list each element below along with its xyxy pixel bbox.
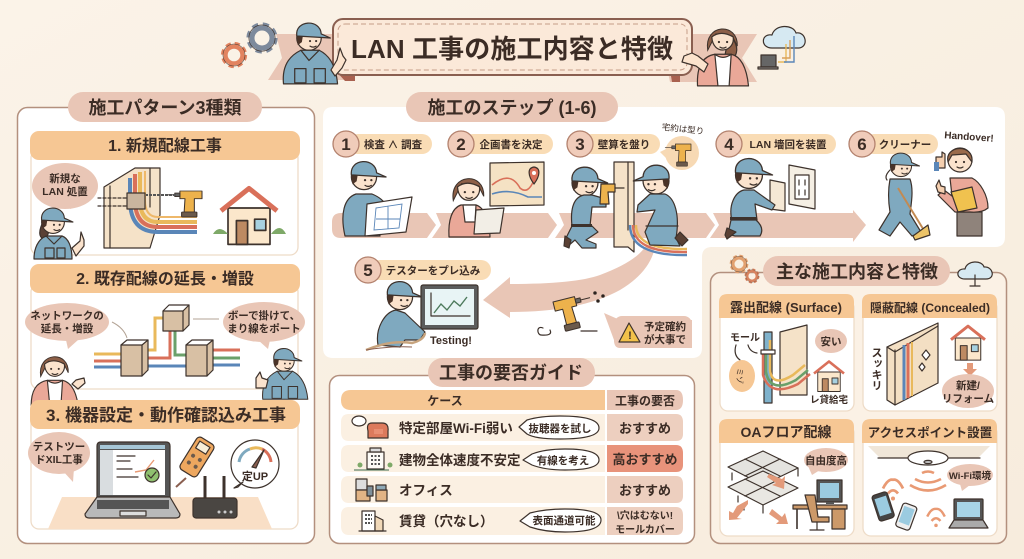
step 1 label: 1: [341, 135, 351, 154]
arrows: [729, 474, 788, 524]
icon: building: [354, 448, 392, 470]
icon: house: [951, 326, 985, 360]
bubble: 表面通道可能: [520, 509, 601, 532]
ribbon behind title: [268, 34, 757, 82]
card: surface wiring: [719, 294, 854, 411]
icon: gears: [223, 25, 275, 66]
panel: 施工パターン3種類: [18, 92, 314, 544]
step 5 label: テスターをプレ込み: [386, 264, 481, 277]
row 4: \穴はむない!: [617, 509, 673, 522]
worker drilling: [564, 167, 624, 248]
worker installing: [725, 159, 775, 239]
bubble: 新建/リフォーム: リフォーム: [942, 393, 994, 405]
icon: cloud small: [958, 262, 992, 286]
bubble: 新建/リフォーム: 新建/: [956, 379, 980, 392]
speech bubble: テストツー: [33, 441, 85, 453]
speech bubble left: 延長・増設: [41, 322, 94, 335]
phone: [895, 502, 918, 531]
title plate: [333, 19, 692, 75]
heading: guide: [428, 358, 595, 387]
bubble: 有線を考え: [523, 449, 599, 470]
process arrow: upper flow: [332, 210, 866, 242]
speech bubble right: [223, 302, 305, 349]
icon: cloud and laptop: [758, 26, 805, 69]
card: concealed wiring: [862, 294, 997, 411]
speech bubble left: [25, 303, 109, 349]
step 6 label: クリーナー: [879, 139, 931, 151]
cable junction boxes: [94, 305, 240, 376]
speech bubble right: まり線をポート: [227, 322, 301, 335]
section 3: equipment setup: [28, 400, 300, 529]
map: [490, 162, 544, 206]
row 2: 建物全体速度不安定: [399, 452, 521, 468]
wall outlet: [789, 165, 815, 209]
worker girl: [34, 208, 84, 259]
step 4 label: 4: [724, 135, 734, 154]
section 1: new wiring: [30, 131, 300, 259]
card header: 露出配線 (Surface): [730, 300, 842, 315]
row 2: [341, 445, 683, 472]
heading: steps: [406, 92, 618, 122]
icon: tester: [178, 436, 216, 478]
header: title banner: [223, 19, 805, 86]
bubble: 抜聴器を試し: 抜聴器を試し: [528, 422, 592, 435]
icon: laptop: [85, 442, 180, 518]
process arrow: return flow: [483, 247, 655, 318]
section 3 header: 3. 機器設定・動作確認込み工事: [46, 406, 286, 425]
bubble: 表面通道可能: 表面通道可能: [532, 514, 596, 527]
heading: construction patterns: [68, 92, 262, 122]
callout: orange doodle: ミゾ: [735, 368, 744, 384]
woman: [31, 357, 79, 410]
card: access point: [862, 419, 997, 536]
row 1: 特定部屋Wi-Fi弱い: [399, 421, 513, 436]
step 1 label: [333, 131, 432, 157]
worker sweeping: [879, 153, 930, 240]
section 1 header: 1. 新規配線工事: [108, 136, 222, 155]
title: LAN 工事の施工内容と特徴: [351, 34, 673, 64]
step 3: [564, 122, 705, 255]
table header: 工事の要否: [615, 393, 675, 408]
worker testing: [366, 282, 425, 350]
cable mold illustration: [735, 325, 810, 403]
speech bubble left: ネットワークの: [30, 310, 104, 322]
drill callout: 宅約は型り: [661, 122, 705, 136]
step 6 label: [849, 131, 938, 157]
drill callout: [660, 122, 705, 170]
step 6: [849, 130, 994, 240]
icon: apartment: [359, 511, 386, 531]
woman with document: [449, 179, 504, 237]
bubble: 有線を考え: 有線を考え: [537, 454, 589, 467]
step 4 label: [716, 131, 836, 157]
wall cross-section: [887, 323, 938, 405]
step 3 label: 壁算を盤り: [598, 138, 650, 151]
section 3 header: [30, 400, 300, 429]
bubble: 安い: 安い: [820, 335, 842, 348]
table header: [341, 390, 683, 410]
section 2 header: [30, 264, 300, 293]
wall with cables and drill: [98, 168, 202, 248]
panel: 施工のステップ: [323, 92, 1005, 358]
icon: house: [221, 188, 277, 244]
panel: 工事の要否ガイド: [330, 358, 694, 544]
section 1 header: [30, 131, 300, 160]
testing label: Testing!: [430, 335, 472, 347]
vertical text: スッキリ: [870, 347, 882, 391]
panel: 主な施工内容と特徴: [710, 256, 1006, 544]
step 5: [355, 257, 692, 350]
heading: guide: 工事の要否ガイド: [439, 363, 583, 383]
down arrow: [963, 363, 977, 376]
step 6 label: 6: [857, 135, 867, 154]
speech bubble: ドXIL工事: [35, 453, 83, 466]
raised floor: [728, 451, 798, 513]
speech bubble: [28, 432, 90, 482]
section 2 header: 2. 既存配線の延長・増設: [76, 269, 254, 288]
speech bubble: 新規なLAN処置: 新規な: [49, 172, 81, 185]
heading: construction patterns: 施工パターン3種類: [88, 98, 242, 118]
step 5 label: 5: [363, 261, 373, 280]
wifi waves center: [910, 472, 946, 490]
step 2 label: 2: [456, 135, 466, 154]
handover text: Handover!: [944, 130, 994, 145]
speech bubble: 新規なLAN処置: [32, 163, 98, 209]
worker: [263, 349, 308, 399]
row 3: オフィス: [399, 483, 453, 498]
card: OA floor: [719, 419, 854, 536]
row 3: [341, 476, 683, 503]
worker pulling cables: [633, 165, 688, 246]
ceiling: [868, 446, 990, 458]
client with clipboard: [934, 148, 988, 236]
laptop: [949, 499, 988, 528]
card: surface wiring: レ貸給宅: [810, 394, 848, 406]
icon: gears small: [731, 256, 758, 282]
row 3: おすすめ: [619, 483, 671, 498]
phone: [871, 491, 895, 522]
access point device: [908, 451, 948, 465]
desk and chair: [793, 480, 847, 530]
step 4 label: LAN 墻回を装置: [750, 138, 827, 151]
heading: main works: 主な施工内容と特徴: [776, 262, 938, 282]
step 2 label: 企画書を決定: [480, 138, 543, 151]
row 4: モールカバー: [615, 524, 675, 536]
bubble: 抜聴器を試し: [519, 416, 599, 439]
speed gauge bubble: [231, 440, 279, 488]
bubble: 自由度高: 自由度高: [805, 454, 847, 467]
card header: OAフロア配線: [740, 424, 832, 440]
heading: steps: 施工のステップ (1-6): [427, 98, 597, 118]
step 3 label: [567, 131, 660, 157]
card header: アクセスポイント設置: [868, 425, 992, 440]
step 5 label: [355, 257, 491, 283]
speed gauge bubble: 定UP: [242, 470, 268, 483]
speech bubble: 新規なLAN処置: LAN 処置: [42, 185, 88, 198]
table header: ケース: [427, 394, 463, 408]
step 4: [716, 131, 836, 239]
bubble: 新建/リフォーム: [942, 374, 994, 408]
row 4: [341, 507, 683, 536]
step 1 label: 検査 ∧ 調査: [364, 138, 423, 151]
desk: [48, 497, 272, 529]
section 2: extension: [25, 264, 308, 410]
row 1: [341, 414, 683, 441]
step 1: [333, 131, 432, 236]
warning callout: [604, 313, 692, 348]
worker with blueprint: [343, 162, 412, 236]
drill and dust: [538, 292, 604, 335]
step 3 label: 3: [575, 135, 585, 154]
row 2: 高おすすめ: [612, 452, 678, 467]
step 2 label: [448, 131, 553, 157]
wall and cables: [614, 162, 687, 255]
heading: main works: [763, 256, 950, 286]
worker presenter: [283, 23, 346, 84]
wifi icons: [883, 480, 903, 500]
step 2: [448, 131, 553, 237]
icon: office desks: [356, 479, 387, 501]
speech bubble right: ボーで掛けて、: [228, 309, 300, 322]
warning callout: !: [628, 330, 632, 342]
row 4: 賃貸（穴なし）: [399, 513, 494, 529]
woman presenter: [682, 29, 749, 86]
row 1: おすすめ: [619, 421, 671, 436]
warning callout: が大事で: [644, 333, 686, 346]
icon: sofa: [352, 416, 388, 438]
connector lines: [112, 319, 219, 338]
bubble: Wi-Fi環境: Wi-Fi環境: [949, 470, 992, 482]
icon: router: [193, 476, 237, 518]
card header: 隠蔽配線 (Concealed): [870, 300, 990, 315]
icon: rental house: [814, 362, 844, 392]
monitor: [421, 285, 478, 329]
card: surface wiring: モール: [730, 332, 760, 344]
warning callout: 予定確約: [644, 320, 686, 333]
